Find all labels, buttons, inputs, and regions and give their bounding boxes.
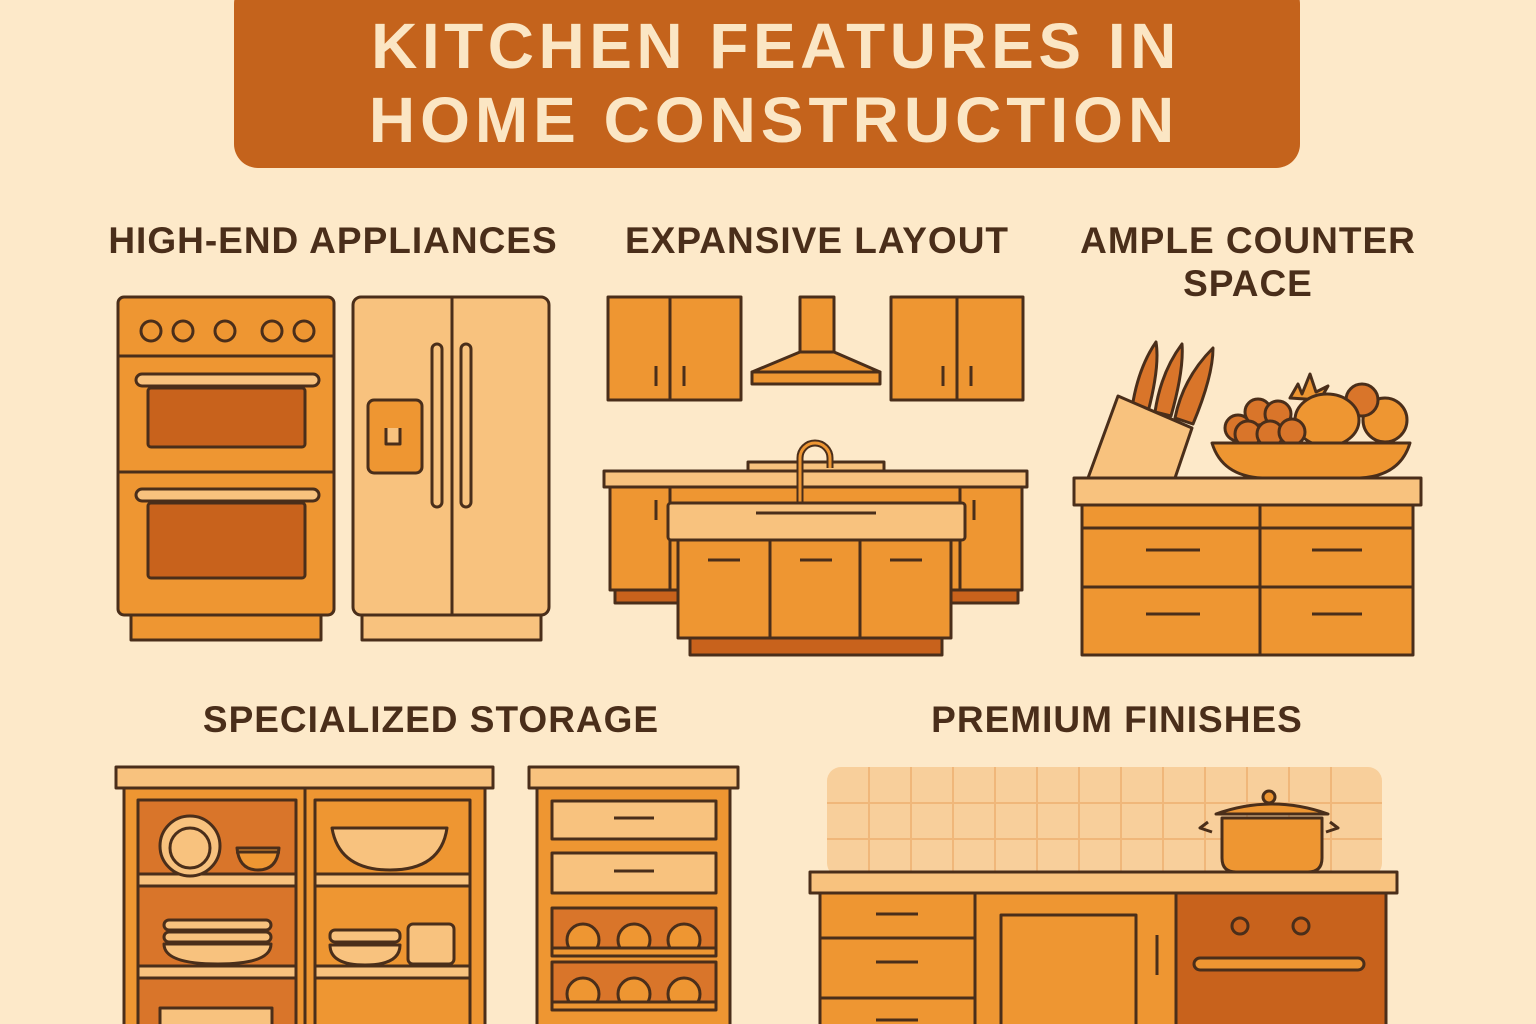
title banner (234, 0, 1300, 168)
title banner: KITCHEN FEATURES IN (371, 10, 1181, 82)
title banner: HOME CONSTRUCTION (369, 84, 1179, 156)
icon: storage cabinet (116, 767, 493, 1024)
heading: expansive layout: EXPANSIVE LAYOUT (625, 220, 1009, 261)
icon: counter with knife block and fruit (1074, 342, 1421, 655)
heading: premium finishes: PREMIUM FINISHES (931, 699, 1303, 740)
heading: ample counter space: SPACE (1183, 263, 1313, 304)
heading: specialized storage: SPECIALIZED STORAGE (203, 699, 659, 740)
heading: ample counter space: AMPLE COUNTER (1080, 220, 1416, 261)
icon: premium finishes kitchen (810, 767, 1397, 1024)
icon: double oven (118, 297, 334, 640)
heading: high-end appliances: HIGH-END APPLIANCES (108, 220, 558, 261)
icon: expansive layout kitchen (604, 297, 1027, 655)
icon: drawer tower with wine rack (529, 767, 738, 1024)
icon: refrigerator (353, 297, 549, 640)
